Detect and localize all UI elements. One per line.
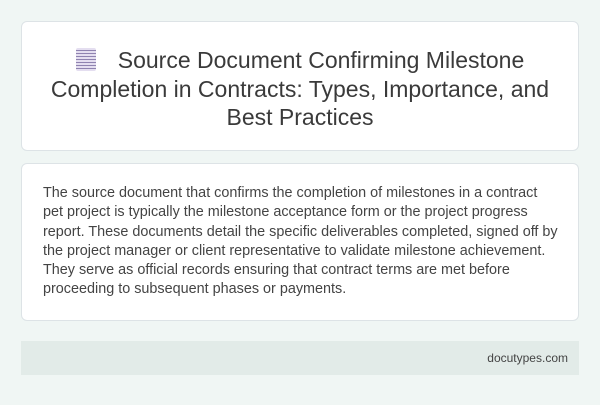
text block: The source document that confirms the completion of milestones in a contract pet project is typically the milestone acceptance form or the project progress report. These documents detail the specific deliverables completed, signed off by the project manager or client representative to validate milestone achievement. They serve as official records ensuring that contract terms are met before proceeding to subsequent phases or payments. [43,185,558,297]
panel: description [21,163,579,321]
footer: docutypes.com [487,351,568,365]
footer [21,341,579,375]
title: Source Document Confirming Milestone Completion in Contracts: Types, Importance, and Best Practices [51,47,549,130]
panel: title card [21,21,579,151]
